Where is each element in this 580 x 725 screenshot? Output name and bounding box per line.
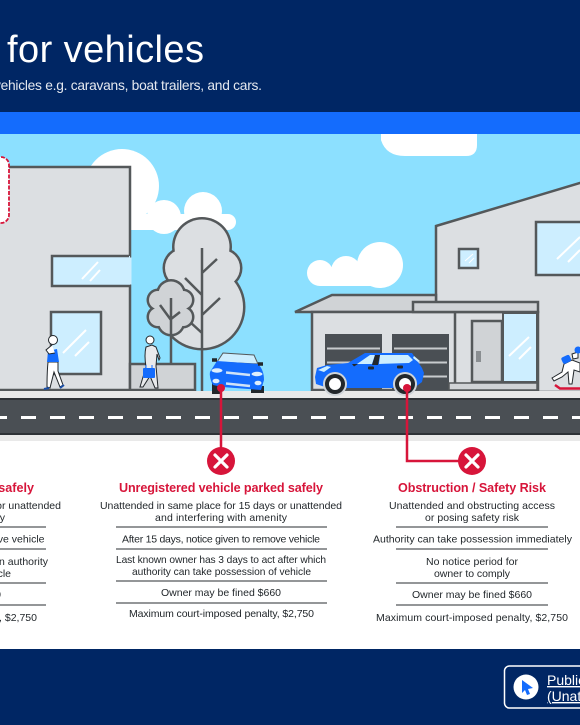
- garage divider: [454, 312, 456, 390]
- panel: unregistered vehicle parked safely: Owner may be fined $660: [161, 587, 281, 599]
- person walking, phone: [44, 336, 64, 389]
- right house: [295, 180, 580, 392]
- small tree: [146, 279, 194, 364]
- band window: [52, 256, 132, 286]
- big tree: [158, 217, 246, 391]
- large window: [536, 222, 580, 275]
- road: [0, 398, 580, 441]
- panel: unregistered vehicle parked safely: Maximum court-imposed penalty, $2,750: [129, 608, 314, 620]
- connector: right car: [403, 384, 460, 461]
- left building: [0, 167, 132, 390]
- porch step: [449, 383, 537, 390]
- panel: unregistered vehicle parked safely: Unattended in same place for 15 days or unattended: [100, 500, 342, 512]
- icon: cursor: [514, 674, 538, 700]
- panel: left column, clipped: [0, 481, 61, 624]
- person walking, bag: [140, 336, 160, 388]
- panel: obstruction / safety risk: Owner may be fined $660: [412, 589, 532, 601]
- lower window: [51, 312, 101, 374]
- panel: obstruction / safety risk: [373, 481, 573, 624]
- street illustration: [0, 134, 580, 441]
- door side glass: [503, 313, 537, 382]
- porch roof: [413, 302, 538, 312]
- panel: unregistered vehicle parked safely: [100, 481, 342, 620]
- link text: [547, 672, 580, 704]
- footer: [0, 649, 580, 725]
- callout box clipped at left: [0, 157, 9, 223]
- side-view blue car: [315, 353, 424, 396]
- garage wall: [312, 312, 538, 390]
- panel: obstruction / safety risk: or posing safety risk: [425, 512, 520, 524]
- garage doors: [325, 334, 449, 390]
- icon: cross middle: [207, 447, 235, 475]
- connector: left car: [217, 384, 225, 450]
- front-facing blue car: [210, 353, 264, 394]
- cloud: mid right: [307, 242, 403, 288]
- panel: obstruction / safety risk: No notice period for: [426, 556, 518, 568]
- planter: [130, 364, 195, 390]
- panel: unregistered vehicle parked safely: and interfering with amenity: [155, 512, 288, 524]
- link button: [504, 666, 580, 708]
- small window: [459, 249, 478, 268]
- garage roof: [295, 295, 436, 312]
- panel: unregistered vehicle parked safely: authority can take possession of vehicle: [132, 567, 311, 578]
- panel: obstruction / safety risk: Authority can take possession immediately: [373, 534, 573, 546]
- blue band: [0, 112, 580, 134]
- cloud: behind left building: [85, 149, 236, 234]
- heading: Obstruction / Safety Risk: [398, 481, 547, 495]
- sky: [0, 134, 580, 392]
- panel: obstruction / safety risk: owner to comply: [434, 568, 511, 580]
- sidewalk: [0, 391, 580, 398]
- person on skateboard: [552, 346, 580, 388]
- panel: unregistered vehicle parked safely: Last known owner has 3 days to act after which: [116, 555, 326, 566]
- front door: [472, 321, 502, 382]
- heading: Unregistered vehicle parked safely: [119, 481, 323, 495]
- panel: obstruction / safety risk: Maximum court-imposed penalty, $2,750: [376, 612, 568, 624]
- panel: obstruction / safety risk: Unattended and obstructing access: [389, 500, 555, 512]
- title: for vehicles: [7, 29, 204, 71]
- panel: unregistered vehicle parked safely: After 15 days, notice given to remove vehicle: [122, 534, 320, 546]
- header banner: [0, 0, 580, 112]
- cloud: top: [381, 134, 477, 156]
- icon: cross right: [458, 447, 486, 475]
- subtitle: vehicles e.g. caravans, boat trailers, and cars.: [0, 78, 262, 93]
